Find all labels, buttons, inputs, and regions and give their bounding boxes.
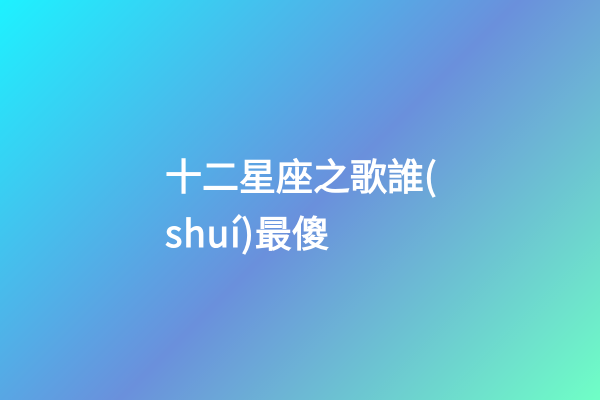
title: 十二星座之歌誰( (165, 147, 437, 201)
title: shuí)最傻 (165, 204, 329, 258)
title (165, 147, 437, 258)
